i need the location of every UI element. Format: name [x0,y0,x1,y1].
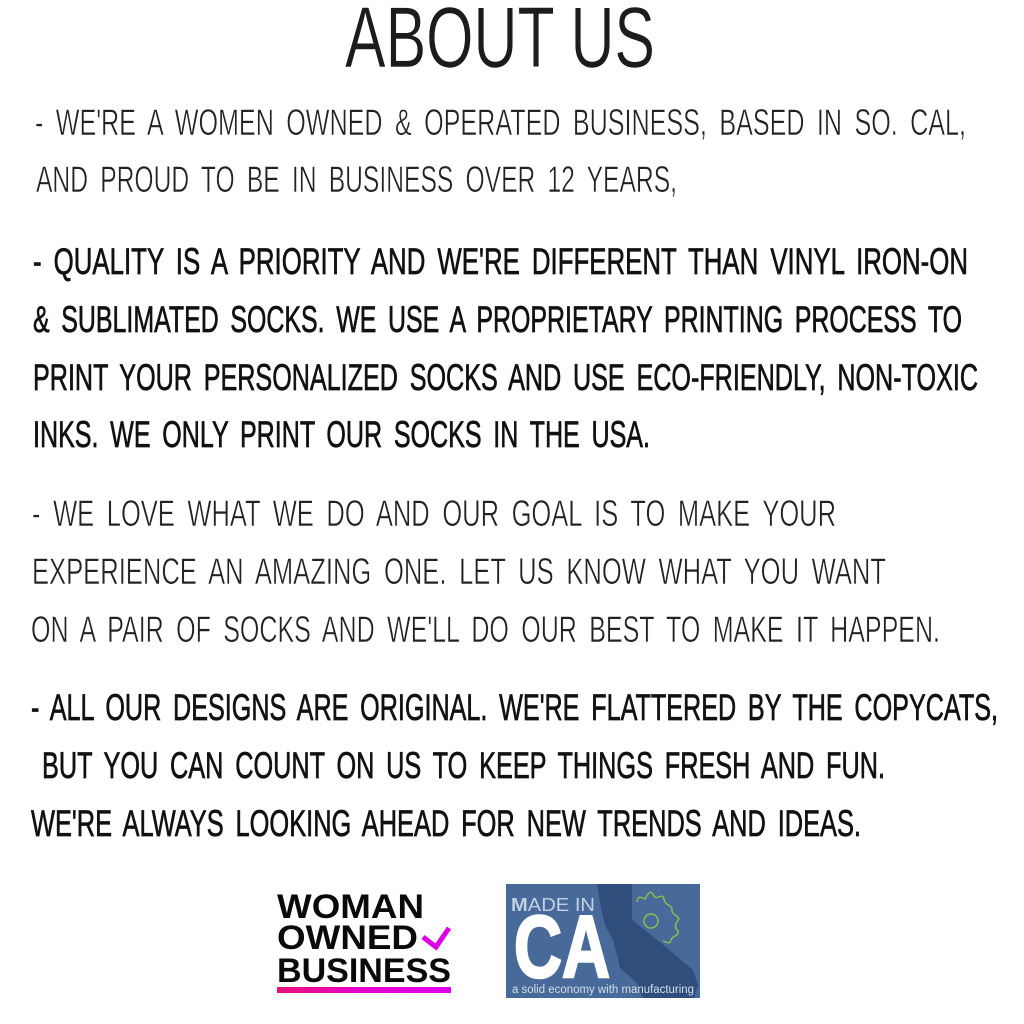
logo: made in CA: MADE IN [511,895,595,915]
icon: gear outline [637,892,679,943]
logo: woman owned business: OWNED [277,919,418,957]
text block: women owned business [35,102,966,200]
text block: quality and printing process [33,241,978,455]
logo: woman owned business [277,888,451,993]
icon: California silhouette [597,884,698,998]
logo: made in CA: CA [514,897,610,996]
magenta underline bar [277,987,451,993]
text block: customer experience [31,493,940,650]
logo: woman owned business: WOMAN [277,888,424,926]
logo: made in CA [506,884,700,998]
text block: women owned business: AND PROUD TO BE IN BUSINESS OVER 12 YEARS, [36,159,677,200]
text block: quality and printing process: INKS. WE ONLY PRINT OUR SOCKS IN THE USA. [33,414,650,455]
text block: original designs [31,687,998,844]
logo: woman owned business: BUSINESS [277,952,451,990]
icon: magenta check mark [423,928,449,947]
logo: made in CA: a solid economy with manufacturing [512,984,694,996]
